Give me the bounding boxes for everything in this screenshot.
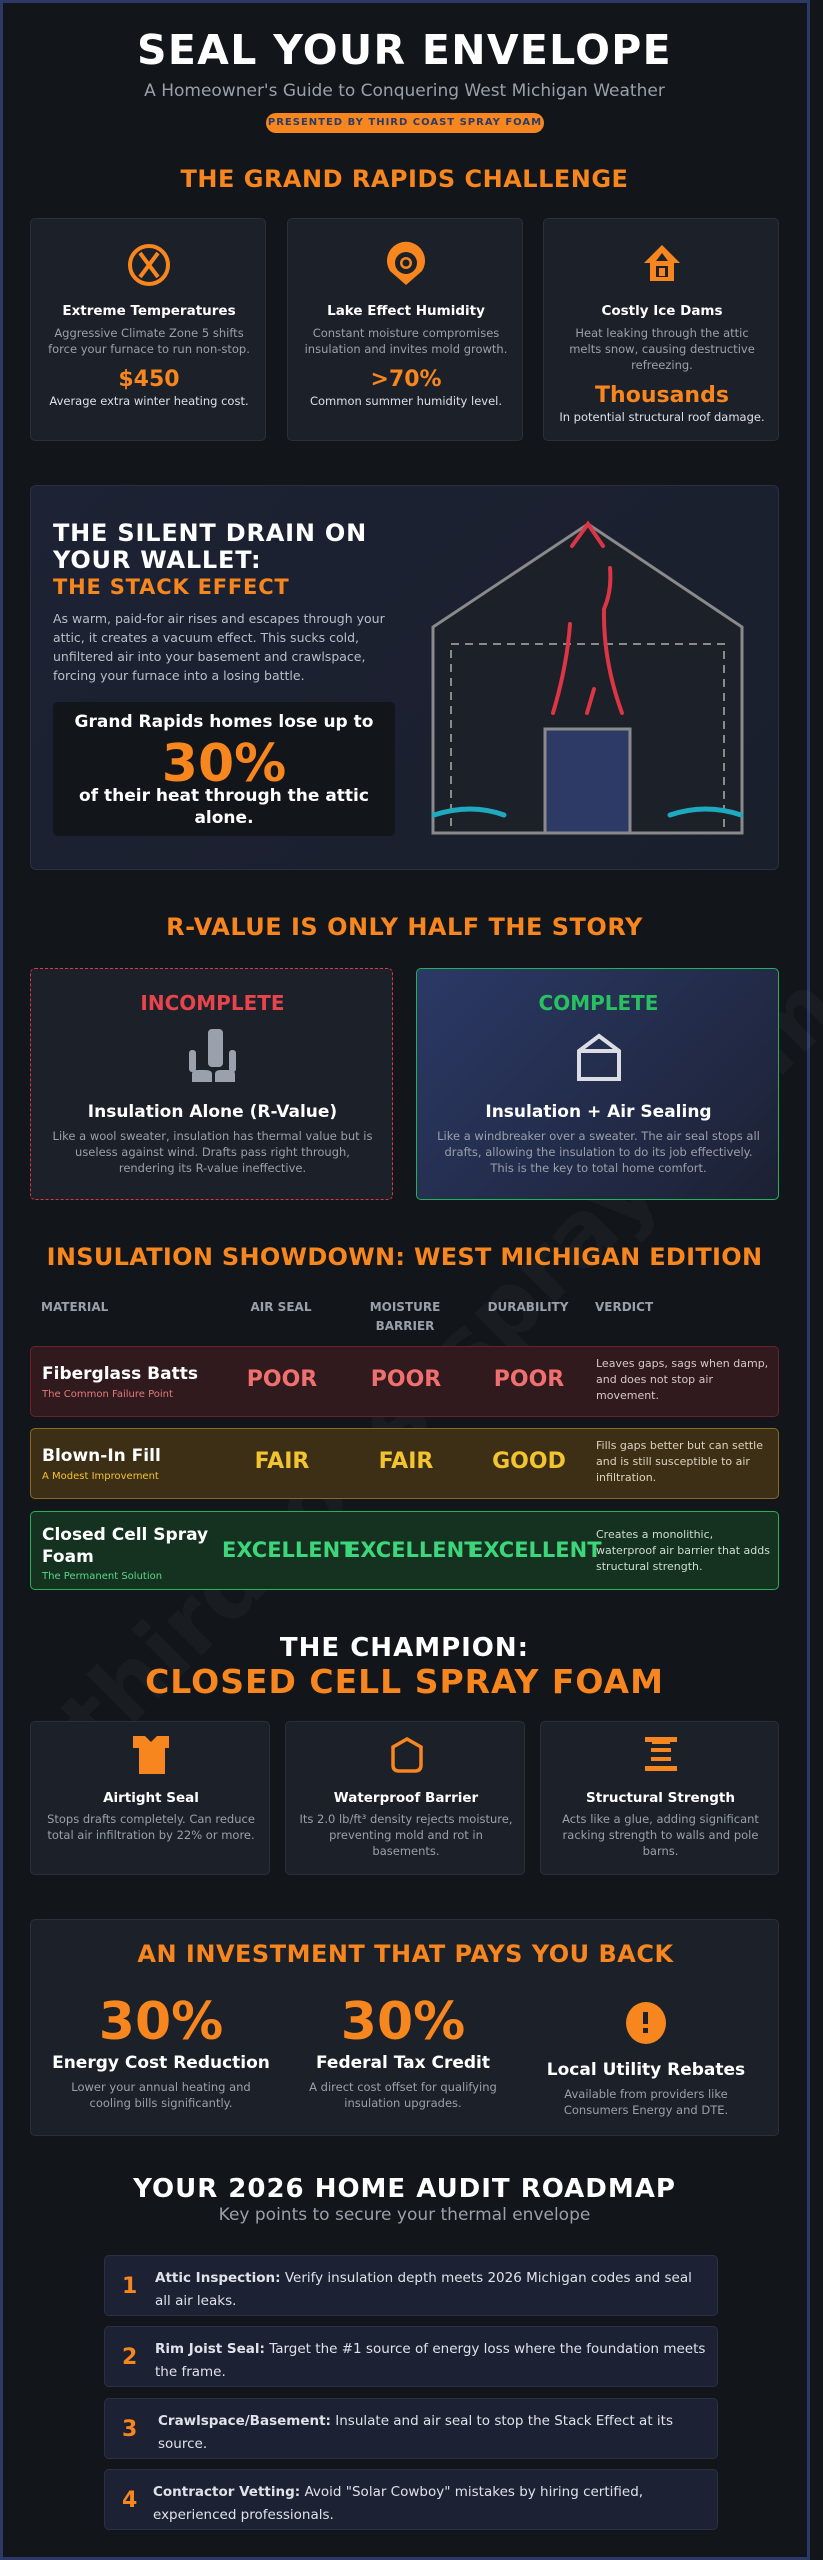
panel: incomplete: INCOMPLETE <box>140 991 285 1015</box>
step 1 <box>104 2255 718 2316</box>
heading: r-value: R-VALUE IS ONLY HALF THE STORY <box>166 913 643 941</box>
heading: roadmap <box>132 2174 676 2225</box>
panel: complete: COMPLETE <box>539 991 658 1015</box>
icon: insulation bits <box>189 1029 236 1082</box>
row: fiberglass batts: Fiberglass Batts <box>42 1364 198 1384</box>
icon: shield <box>391 1737 423 1773</box>
badge: PRESENTED BY THIRD COAST SPRAY FOAM <box>268 117 542 128</box>
row: fiberglass batts: The Common Failure Point <box>42 1389 173 1400</box>
panel: complete: Like a windbreaker over a sweater. The air seal stops all drafts, allowing the insulation to do its job effectively. This is the key to total home comfort. <box>437 1129 760 1175</box>
panel: extreme temperatures <box>30 218 266 441</box>
step 4: Contractor Vetting: Avoid "Solar Cowboy" mistakes by hiring certified, experienced professionals. <box>153 2484 643 2523</box>
row: blown-in fill: A Modest Improvement <box>42 1471 159 1482</box>
panel: costly ice dams: Costly Ice Dams <box>601 303 723 319</box>
heading: silent drain <box>52 519 367 574</box>
stat: federal tax credit: A direct cost offset for qualifying insulation upgrades. <box>309 2080 497 2110</box>
diagram: house stack effect <box>432 520 744 834</box>
row: blown-in fill: Fills gaps better but can settle and is still susceptible to air infiltration. <box>596 1439 763 1484</box>
row: closed cell spray foam: The Permanent Solution <box>42 1571 162 1582</box>
row: closed cell spray foam: Closed Cell Spray Foam <box>42 1525 208 1567</box>
stat: energy cost reduction: 30% <box>99 1992 223 2052</box>
panel: incomplete: Insulation Alone (R-Value) <box>88 1102 337 1122</box>
heading: the champion: THE CHAMPION: <box>280 1633 529 1663</box>
row: fiberglass batts: POOR <box>494 1367 564 1392</box>
step 1: 1 <box>122 2274 137 2299</box>
panel: waterproof barrier <box>285 1721 525 1875</box>
panel: costly ice dams <box>543 218 779 441</box>
row: fiberglass batts: POOR <box>371 1367 441 1392</box>
panel: lake effect humidity: Constant moisture compromises insulation and invites mold growth. <box>305 326 507 356</box>
icon: drop <box>387 242 425 285</box>
step 1: Attic Inspection: Verify insulation depth meets 2026 Michigan codes and seal all air leaks. <box>155 2270 692 2309</box>
title: SEAL YOUR ENVELOPE <box>137 26 672 74</box>
heading: roadmap: Key points to secure your thermal envelope <box>219 2205 590 2225</box>
panel: waterproof barrier: Waterproof Barrier <box>334 1790 478 1806</box>
stat: local utility rebates: Available from providers like Consumers Energy and DTE. <box>564 2087 728 2117</box>
panel: lake effect humidity: Lake Effect Humidity <box>327 303 485 319</box>
panel: airtight seal: Stops drafts completely. Can reduce total air infiltration by 22% or more. <box>47 1812 255 1842</box>
step 4 <box>104 2469 718 2530</box>
text: stack effect description: As warm, paid-for air rises and escapes through your attic, it creates a vacuum effect. This sucks cold, unfiltered air into your basement and crawlspace, forcing your furnace into a losing battle. <box>53 611 385 683</box>
callout: 30% heat loss: of their heat through the attic alone. <box>79 786 369 828</box>
heading: silent drain: THE SILENT DRAIN ON <box>53 519 367 547</box>
table header <box>41 1300 654 1333</box>
panel: airtight seal <box>30 1721 270 1875</box>
step 3: 3 <box>122 2417 137 2442</box>
table header: AIR SEAL <box>251 1300 311 1314</box>
panel: waterproof barrier: Its 2.0 lb/ft³ density rejects moisture, preventing mold and rot in basements. <box>299 1812 513 1858</box>
heading: grand rapids challenge: THE GRAND RAPIDS CHALLENGE <box>181 165 628 193</box>
heading: the champion: CLOSED CELL SPRAY FOAM <box>145 1662 664 1701</box>
table header: VERDICT <box>595 1300 653 1314</box>
stat: federal tax credit: 30% <box>341 1992 465 2052</box>
panel: extreme temperatures: Aggressive Climate Zone 5 shifts force your furnace to run non-stop. <box>48 326 250 356</box>
row: fiberglass batts: Leaves gaps, sags when damp, and does not stop air movement. <box>596 1357 768 1402</box>
stat: energy cost reduction: Lower your annual heating and cooling bills significantly. <box>71 2080 251 2110</box>
subtitle: A Homeowner's Guide to Conquering West Michigan Weather <box>144 81 665 101</box>
panel: incomplete <box>30 968 393 1200</box>
row: fiberglass batts: POOR <box>247 1367 317 1392</box>
stat: federal tax credit: Federal Tax Credit <box>316 2053 490 2073</box>
row: fiberglass batts <box>30 1346 779 1417</box>
row: closed cell spray foam: EXCELLENT <box>222 1538 355 1562</box>
stat: local utility rebates: Local Utility Rebates <box>547 2060 745 2080</box>
heading: insulation showdown: INSULATION SHOWDOWN: WEST MICHIGAN EDITION <box>47 1243 762 1271</box>
icon: layered bars <box>645 1737 677 1771</box>
panel: structural strength: Structural Strength <box>586 1790 735 1806</box>
step 4: 4 <box>122 2488 137 2513</box>
panel: extreme temperatures: Average extra winter heating cost. <box>49 394 249 408</box>
panel: structural strength <box>540 1721 779 1875</box>
step 2: 2 <box>122 2345 137 2370</box>
icon: coin alert <box>626 2002 666 2044</box>
panel: extreme temperatures: Extreme Temperatures <box>62 303 236 319</box>
panel: incomplete: Like a wool sweater, insulation has thermal value but is useless against wind. Drafts pass right through, rendering its R-value ineffective. <box>53 1129 372 1175</box>
panel: costly ice dams: In potential structural roof damage. <box>559 410 765 424</box>
callout: 30% heat loss: 30% <box>162 734 286 794</box>
icon: shirt <box>133 1736 169 1774</box>
row: blown-in fill: FAIR <box>379 1449 433 1474</box>
row: blown-in fill: Blown-In Fill <box>42 1446 161 1466</box>
step 2: Rim Joist Seal: Target the #1 source of energy loss where the foundation meets the frame. <box>155 2341 705 2380</box>
heading: investment: AN INVESTMENT THAT PAYS YOU BACK <box>137 1940 674 1968</box>
panel: airtight seal: Airtight Seal <box>103 1790 199 1806</box>
panel: costly ice dams: Thousands <box>595 383 729 408</box>
panel: complete: Insulation + Air Sealing <box>485 1102 712 1122</box>
row: closed cell spray foam: EXCELLENT <box>346 1538 479 1562</box>
subheading: stack effect: THE STACK EFFECT <box>53 575 290 599</box>
stat: energy cost reduction: Energy Cost Reduction <box>52 2053 270 2073</box>
callout: 30% heat loss <box>53 702 395 836</box>
heading: silent drain: YOUR WALLET: <box>53 546 261 574</box>
panel: lake effect humidity <box>287 218 523 441</box>
panel: investment <box>30 1919 779 2136</box>
stat: local utility rebates <box>547 2002 745 2117</box>
icon: sealed house <box>577 1034 621 1081</box>
panel: complete <box>416 968 779 1200</box>
panel: costly ice dams: Heat leaking through the attic melts snow, causing destructive refreezing. <box>569 326 755 372</box>
badge <box>266 113 544 133</box>
panel: stack effect <box>30 485 779 870</box>
panel: lake effect humidity: Common summer humidity level. <box>310 394 502 408</box>
icon: thermometer circle <box>128 244 170 286</box>
row: closed cell spray foam: Creates a monolithic, waterproof air barrier that adds structural strength. <box>596 1528 770 1573</box>
row: closed cell spray foam <box>30 1511 779 1590</box>
icon: house <box>644 245 680 281</box>
table header: MOISTURE BARRIER <box>370 1300 440 1333</box>
stat: energy cost reduction <box>52 1992 270 2110</box>
row: blown-in fill <box>30 1428 779 1499</box>
row: closed cell spray foam: EXCELLENT <box>469 1538 602 1562</box>
row: blown-in fill: FAIR <box>255 1449 309 1474</box>
panel: extreme temperatures: $450 <box>118 367 180 392</box>
table header: DURABILITY <box>488 1300 568 1314</box>
callout: 30% heat loss: Grand Rapids homes lose up to <box>75 712 373 732</box>
panel: structural strength: Acts like a glue, adding significant racking strength to walls and pole barns. <box>562 1812 759 1858</box>
panel: lake effect humidity: >70% <box>370 367 442 392</box>
step 2 <box>104 2326 718 2387</box>
heading: the champion <box>145 1633 664 1701</box>
step 3 <box>104 2398 718 2459</box>
table header: MATERIAL <box>41 1300 108 1314</box>
step 3: Crawlspace/Basement: Insulate and air seal to stop the Stack Effect at its source. <box>158 2413 673 2452</box>
row: blown-in fill: GOOD <box>492 1449 566 1474</box>
stat: federal tax credit <box>309 1992 497 2110</box>
heading: roadmap: YOUR 2026 HOME AUDIT ROADMAP <box>133 2174 676 2204</box>
